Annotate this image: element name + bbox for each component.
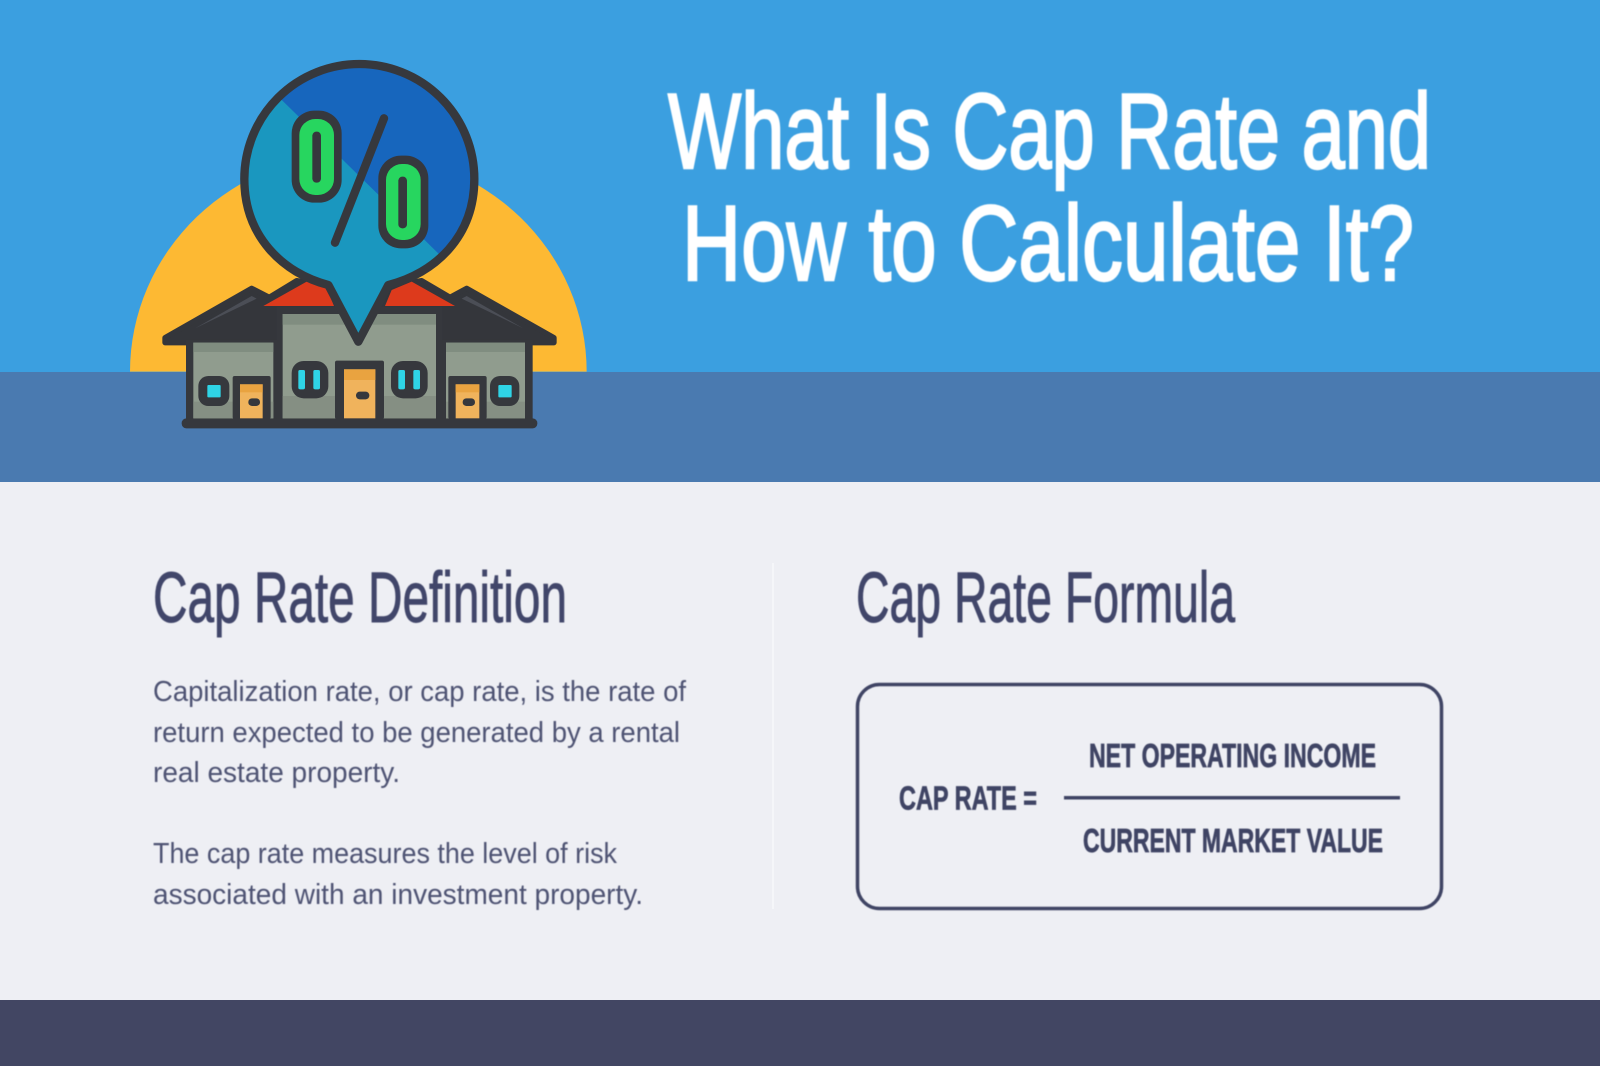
icon: left and right roofs (165, 281, 554, 343)
icon: location pin bubble (244, 40, 493, 342)
heading: cap rate formula: Cap Rate Formula (856, 559, 1235, 638)
icon: left window and door (198, 376, 271, 419)
column divider (772, 563, 774, 909)
formula label: CAP RATE = (899, 780, 1037, 816)
formula denominator: CURRENT MARKET VALUE (1083, 822, 1383, 859)
icon: percent sign (292, 111, 428, 248)
icon: building walls (182, 307, 537, 428)
panel: header lower band (0, 372, 1600, 482)
panel: header background (0, 0, 1600, 372)
icon: right window and door (448, 376, 519, 419)
title (668, 71, 1431, 303)
text block: definition (153, 676, 687, 911)
icon: center door (335, 361, 384, 419)
text block: definition: real estate property. (153, 757, 400, 789)
text block: definition: return expected to be generated by a rental (153, 717, 680, 749)
text block: definition: Capitalization rate, or cap rate, is the rate of (153, 676, 687, 708)
icon: sun (130, 184, 587, 372)
panel: formula box (858, 684, 1442, 908)
icon: houses with percent pin and sun (130, 60, 587, 428)
fraction line (1064, 796, 1400, 800)
icon: center windows (292, 361, 428, 398)
text block: definition: The cap rate measures the level of risk (153, 838, 617, 870)
text block: definition: associated with an investment property. (153, 879, 643, 911)
panel: content background (0, 482, 1600, 1000)
panel: footer bar (0, 1000, 1600, 1066)
heading: cap rate definition: Cap Rate Definition (153, 559, 567, 638)
formula numerator: NET OPERATING INCOME (1089, 737, 1376, 774)
